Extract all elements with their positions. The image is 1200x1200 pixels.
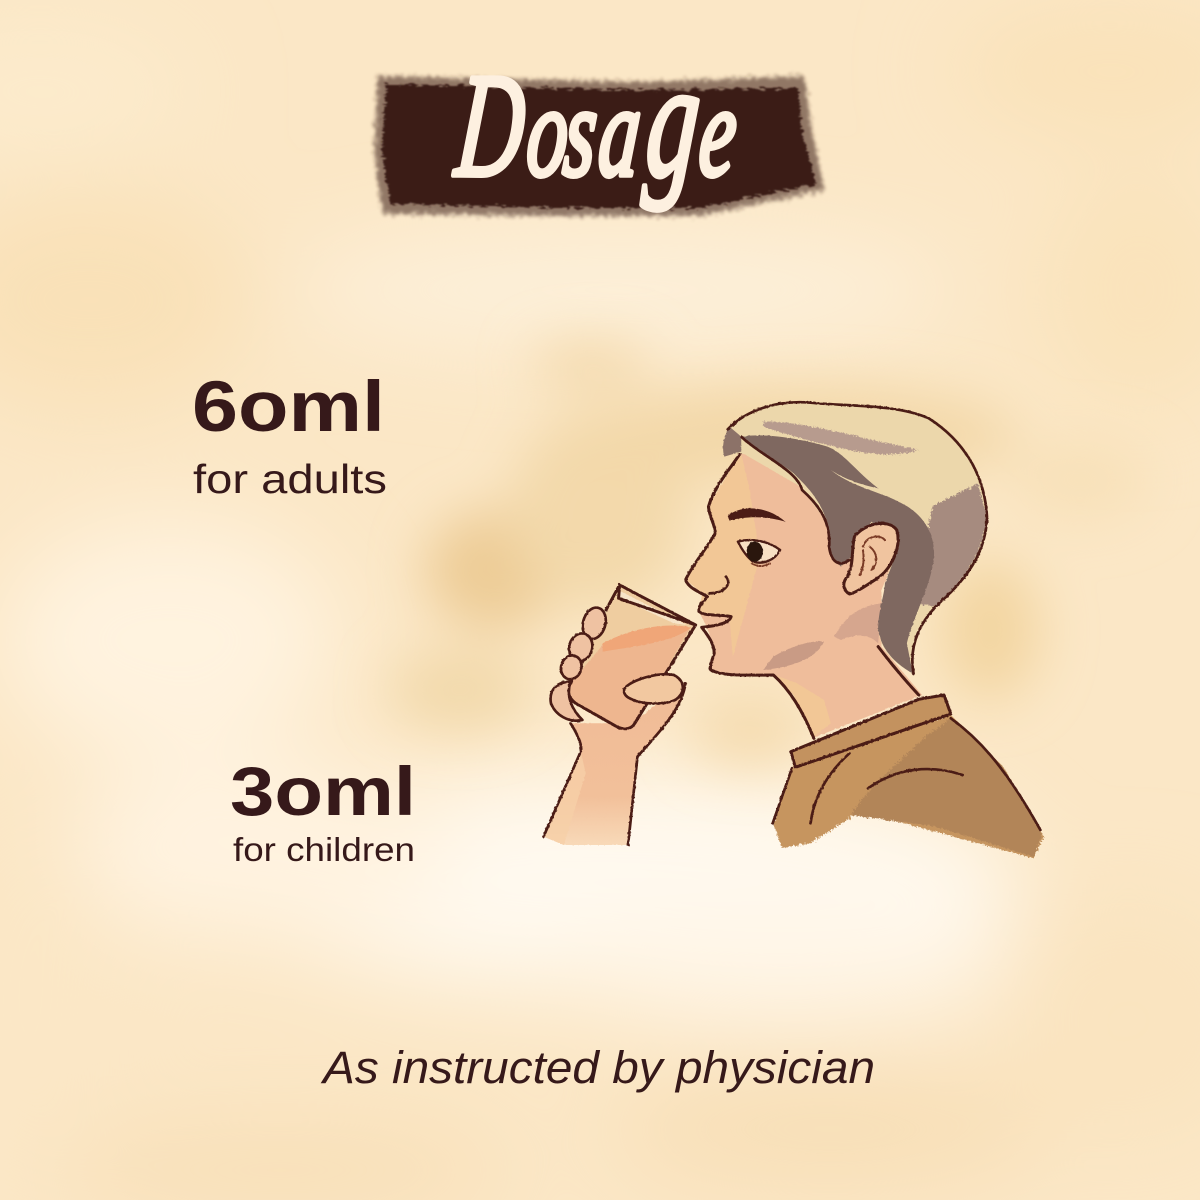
arm and hand xyxy=(544,683,685,845)
ear xyxy=(844,523,898,594)
60ml for adults: for adults xyxy=(193,456,387,502)
illustration: man drinking from a glass xyxy=(544,402,1044,858)
eyebrow xyxy=(728,508,785,522)
fingers xyxy=(551,605,683,721)
nose line xyxy=(709,577,728,593)
title text: g xyxy=(640,28,707,211)
title text: o xyxy=(522,60,575,204)
60ml for adults: 6oml xyxy=(192,368,385,447)
30ml for children xyxy=(230,753,416,868)
hair xyxy=(723,402,987,674)
title text: e xyxy=(694,60,743,204)
60ml for adults xyxy=(192,368,387,502)
glass xyxy=(568,585,696,729)
30ml for children: for children xyxy=(233,831,415,868)
title text: D xyxy=(449,43,531,207)
face and neck xyxy=(685,453,922,738)
title banner: brush stroke xyxy=(374,28,824,216)
shirt xyxy=(773,695,1044,858)
title text: a xyxy=(594,60,647,204)
30ml for children: 3oml xyxy=(230,753,416,830)
title text: s xyxy=(559,60,603,204)
eye xyxy=(738,540,780,566)
footer note: As instructed by physician xyxy=(320,1042,875,1093)
